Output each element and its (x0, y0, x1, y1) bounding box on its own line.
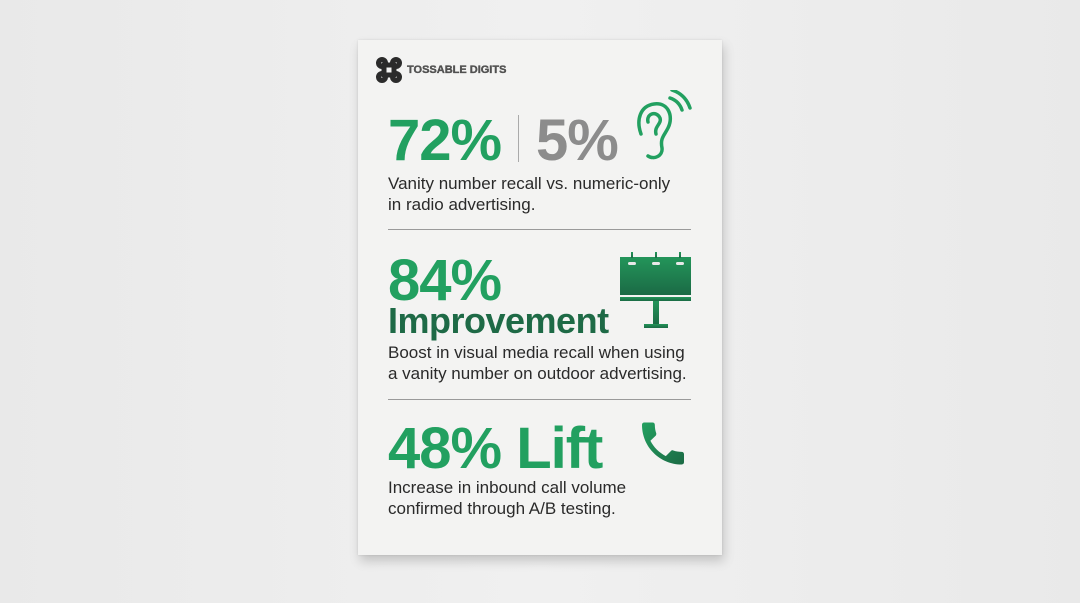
stat 1: 72% vs 5%: 5% (536, 108, 618, 173)
desc 3 (388, 478, 626, 518)
icon: billboard (620, 252, 691, 328)
stat 2: 84% improvement: Improvement (388, 300, 609, 341)
desc 3: confirmed through A/B testing. (388, 499, 616, 518)
desc 1: in radio advertising. (388, 195, 535, 214)
desc 2: Boost in visual media recall when using (388, 343, 685, 362)
desc 1: Vanity number recall vs. numeric-only (388, 174, 670, 193)
icon: ear (637, 90, 692, 160)
desc 1 (388, 174, 670, 214)
stat 2: 84% improvement (388, 248, 609, 341)
logo: TOSSABLE DIGITS (407, 64, 506, 76)
stat 1: 72% vs 5% (388, 108, 618, 173)
card (358, 40, 722, 555)
desc 3: Increase in inbound call volume (388, 478, 626, 497)
icon: phone (642, 422, 684, 464)
stat 1: 72% vs 5%: 72% (388, 108, 501, 173)
stat 3: 48% lift: 48% Lift (388, 416, 602, 481)
logo (376, 57, 506, 83)
stat 2: 84% improvement: 84% (388, 248, 501, 313)
desc 2: a vanity number on outdoor advertising. (388, 364, 687, 383)
desc 2 (388, 343, 687, 383)
